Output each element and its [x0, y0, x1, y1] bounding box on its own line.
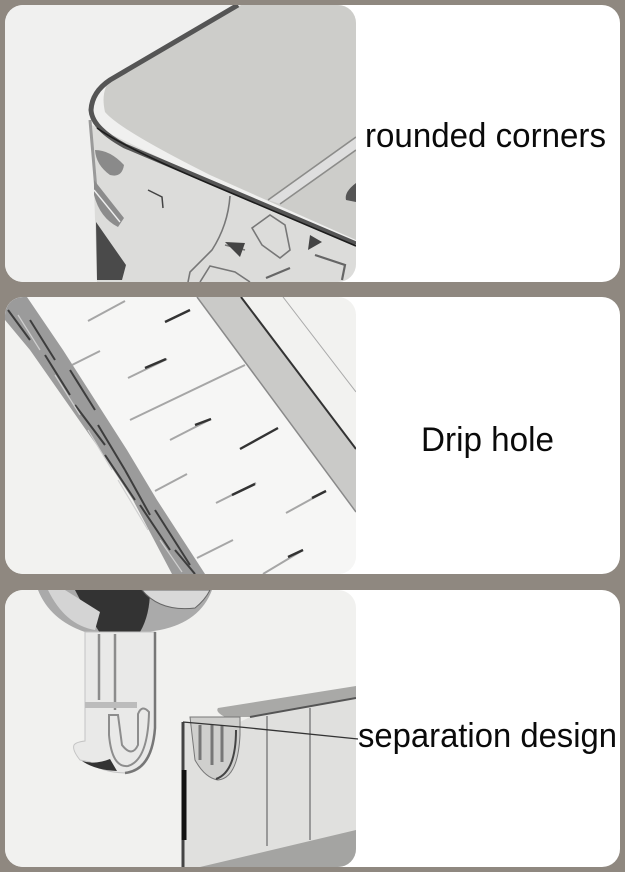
label: rounded corners: rounded corners — [365, 117, 606, 155]
hook suction cup — [38, 590, 212, 634]
panel: drip hole — [5, 297, 620, 574]
photo: tray rounded corner — [5, 5, 356, 282]
photo: drip holes — [5, 297, 356, 574]
photo: hook and tray — [5, 590, 356, 867]
label: drip hole: Drip hole — [421, 421, 554, 459]
label: separation design: separation design — [358, 717, 617, 755]
hook — [74, 632, 155, 773]
panel: rounded corners — [5, 5, 620, 282]
tray — [183, 686, 356, 867]
callout line — [183, 722, 358, 739]
panel: separation design — [5, 590, 620, 867]
